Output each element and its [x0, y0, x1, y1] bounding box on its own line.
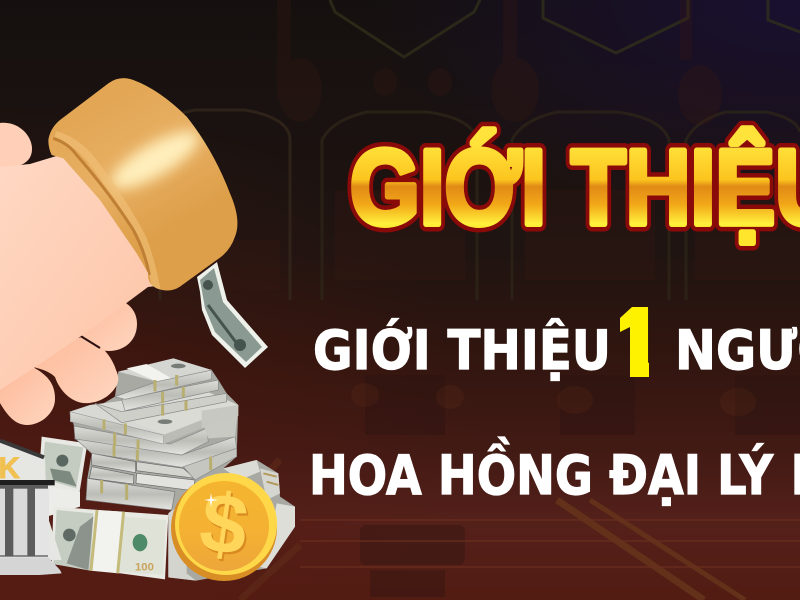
palm and arm	[0, 154, 173, 390]
bottom column under coin	[168, 500, 196, 581]
bank building	[0, 441, 62, 575]
icon: falling banknote	[197, 262, 268, 368]
icon: hand	[0, 123, 173, 425]
white block bundles	[74, 405, 238, 510]
stack silhouette	[70, 358, 295, 581]
icon: stacks of banknotes	[0, 358, 295, 581]
back right bundles	[223, 460, 295, 568]
text: line one: GIỚI THIỆU	[313, 319, 611, 382]
icon: gold dollar coin	[171, 473, 277, 581]
number one highlight: 1	[610, 290, 658, 402]
middle finger	[33, 338, 118, 403]
front banknote bundle: 100	[135, 562, 154, 574]
main top bundles	[70, 358, 238, 500]
icon: gold dollar coin: $	[196, 476, 256, 576]
thumb	[0, 123, 32, 167]
icon: gold dollar coin: $	[194, 474, 254, 574]
front banknote bundle	[52, 507, 168, 579]
lower finger	[0, 367, 55, 425]
leaning bill	[38, 437, 87, 517]
text: line one	[314, 307, 800, 382]
icon: gold wristband	[48, 78, 237, 290]
upper finger	[76, 300, 137, 351]
